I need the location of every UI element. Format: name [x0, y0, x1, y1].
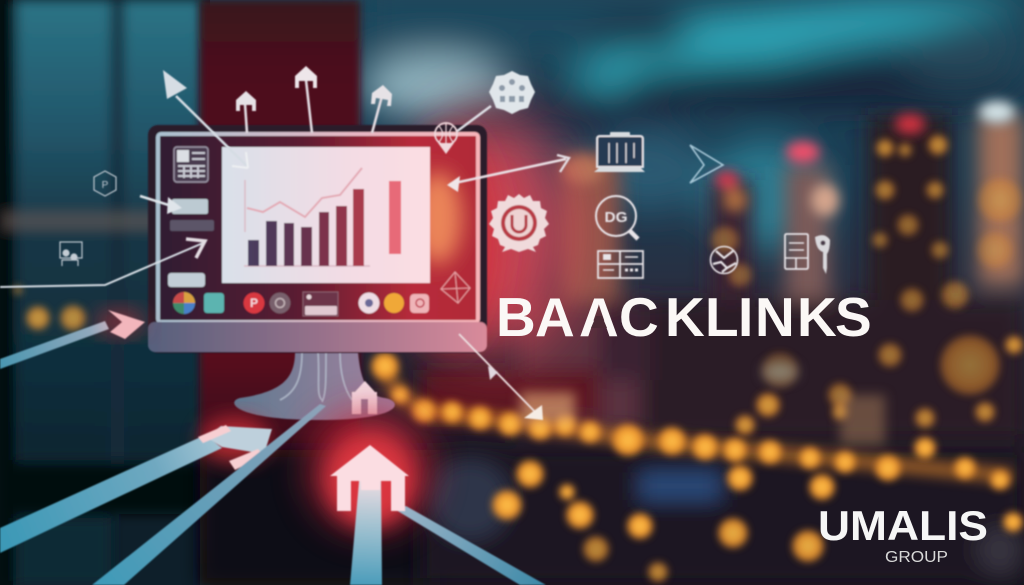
icon: dashboard panel: [598, 251, 643, 278]
app icons row: [173, 292, 429, 316]
icon: laptop: [594, 132, 645, 172]
skyline buildings: [420, 115, 1024, 585]
arrow: double headed to laptop: [447, 155, 569, 192]
glowing light chain: [371, 352, 1023, 582]
monitor chin: [148, 322, 487, 352]
sky and clouds: [360, 0, 1024, 250]
arrow: large left: [0, 425, 272, 553]
monitor: [148, 125, 487, 353]
left small icons: [60, 171, 116, 266]
arrow: diagonal lower: [459, 334, 543, 420]
icon: hexagon: P: [102, 180, 109, 191]
pale reflection panels: [520, 362, 885, 445]
screen: [222, 147, 430, 283]
arrow: left small: [0, 310, 145, 369]
arrow: top left: [163, 70, 248, 168]
large incoming arrows: [0, 310, 546, 585]
arrow: to sidebar: [140, 196, 182, 214]
bar chart: [244, 168, 401, 266]
sidebar widgets: [168, 147, 214, 287]
arrow: up 2: [295, 66, 317, 133]
glow behind arrows: [94, 308, 432, 532]
icon: magnifier DG: DG: [604, 209, 628, 226]
dark red pillar: [200, 0, 360, 585]
right-hand icons: [435, 71, 830, 278]
icon: document and hook: [785, 234, 830, 274]
arrow: right diagonal: [396, 506, 546, 585]
icon: cookie gear: [489, 71, 535, 114]
logo: UMALIS: [818, 502, 988, 549]
arrow: up 3: [371, 85, 392, 133]
tower lights: [563, 101, 1015, 216]
monitor glow: [405, 115, 575, 355]
red glow beside the screen: [414, 172, 462, 264]
logo: GROUP: [885, 549, 948, 566]
icon: seal badge: [489, 194, 549, 252]
arrow: central house: [330, 445, 409, 585]
icon: play triangle: [690, 145, 723, 183]
app icons row: P: [250, 296, 258, 310]
icon: connector line and globe pin: [435, 106, 491, 154]
window frames left: [0, 0, 210, 585]
icon: wire diamond: [441, 272, 470, 303]
icon: magnifier DG: [596, 196, 638, 239]
icon: globe: [710, 246, 738, 274]
icon: small house: [352, 381, 377, 414]
arrow: up 1: [236, 91, 256, 133]
upward link arrows: [0, 66, 569, 420]
arrow: thin diagonal: [92, 404, 326, 585]
bokeh city lights: [13, 135, 1023, 435]
arrow: elbow line: [0, 239, 205, 287]
title: BAACKLINKS: [496, 286, 872, 348]
monitor stand: [234, 352, 395, 420]
icon: person chart: [60, 242, 82, 266]
logo: [818, 502, 988, 566]
